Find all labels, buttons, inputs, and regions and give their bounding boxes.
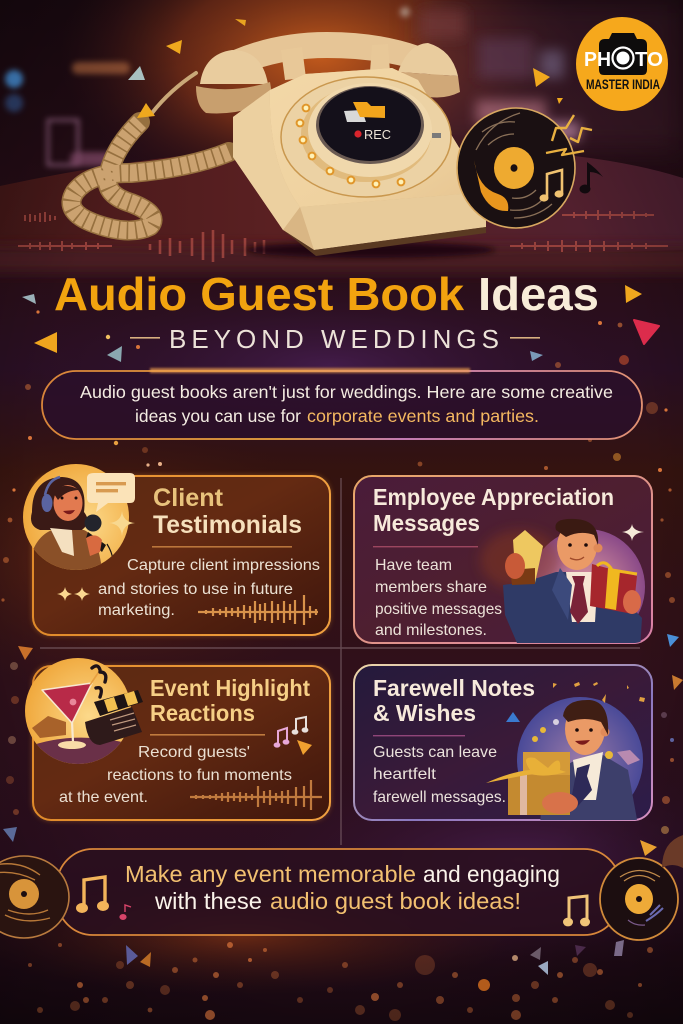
- icon: single dark note: [580, 162, 603, 194]
- icon: sound wave: [198, 595, 318, 625]
- icon: zigzag sound marks: [546, 115, 592, 155]
- illustration: man with card and gift: [480, 519, 645, 650]
- body text: farewell notes: Guests can leave: [373, 744, 497, 761]
- heading: event highlight reactions: Event Highlight: [150, 675, 310, 701]
- body text: event highlight reactions: Record guests': [138, 744, 250, 761]
- heading: client testimonials: Client: [153, 484, 224, 512]
- call to action text: with these: [154, 888, 262, 914]
- REC label: REC: [364, 127, 391, 142]
- body text: employee appreciation: positive messages: [375, 601, 502, 618]
- call to action text: [125, 861, 560, 914]
- planet and lower triangles: [126, 835, 683, 975]
- heading: farewell notes: & Wishes: [373, 700, 476, 726]
- icon: dial lights: [297, 105, 404, 187]
- icon: gold card: [513, 530, 543, 584]
- illustration: man with gift: [486, 697, 643, 825]
- icon: sound wave: [190, 780, 322, 810]
- body text: farewell notes: farewell messages.: [373, 789, 506, 806]
- telephone illustration: [71, 32, 495, 258]
- panel: employee appreciation: [354, 476, 652, 650]
- title: Audio Guest Book: [54, 268, 464, 320]
- vinyl record with music notes: [457, 108, 603, 228]
- Photo Master India logo: TO: [635, 49, 663, 71]
- body text: event highlight reactions: at the event.: [59, 789, 148, 806]
- body text: employee appreciation: members share: [375, 579, 487, 596]
- icon: music notes: [274, 717, 312, 755]
- heading: event highlight reactions: Reactions: [150, 700, 255, 726]
- icon: red gift box: [590, 564, 637, 614]
- body text: event highlight reactions: [59, 744, 292, 806]
- decorative triangles around title: [22, 285, 659, 362]
- heading: client testimonials: [153, 484, 302, 539]
- blurred bar backdrop with bokeh: [5, 0, 683, 205]
- heading: farewell notes: Farewell Notes: [373, 675, 535, 701]
- panel: client testimonials: [23, 464, 330, 635]
- side triangles beside cards: [3, 634, 683, 842]
- panel: call to action: [57, 849, 620, 935]
- body text: employee appreciation: and milestones.: [375, 622, 487, 639]
- title: Ideas: [478, 268, 599, 320]
- Photo Master India logo: [576, 17, 668, 111]
- call to action text: and engaging: [423, 861, 560, 887]
- icon: clapperboard: [85, 707, 142, 745]
- sound waves on table: [18, 210, 668, 262]
- body text: client testimonials: marketing.: [98, 602, 175, 619]
- icon: double note: [540, 170, 564, 202]
- card dividers: [40, 478, 640, 845]
- body text: farewell notes: heartfelt: [373, 766, 437, 783]
- heading: employee appreciation: Employee Appreciation: [373, 484, 614, 510]
- panel: event highlight reactions: [20, 658, 330, 820]
- intro text: corporate events and parties.: [307, 406, 539, 426]
- panel: farewell notes: [354, 665, 652, 825]
- body text: client testimonials: [98, 557, 320, 619]
- body text: employee appreciation: [375, 557, 502, 639]
- background sparkle particles: [1, 310, 675, 1021]
- call to action text: audio guest book ideas!: [270, 888, 521, 914]
- phone body: [233, 68, 486, 250]
- icon: golden gift box: [523, 752, 570, 775]
- intro text: Audio guest books aren't just for weddings. Here are some creative: [80, 382, 613, 402]
- icon: coiled phone cord: [71, 73, 229, 231]
- body text: event highlight reactions: reactions to fun moments: [107, 767, 292, 784]
- icon: speech bubble: [87, 473, 135, 512]
- icon: pink note: [119, 905, 131, 920]
- body text: farewell notes: [373, 744, 506, 806]
- panel: intro: [42, 368, 642, 439]
- confetti: [506, 682, 645, 722]
- table surface: [0, 150, 683, 272]
- Photo Master India logo: PH: [584, 49, 611, 71]
- body text: client testimonials: Capture client impressions: [127, 557, 320, 574]
- intro text: [80, 382, 613, 426]
- icon: avatar with microphone: [23, 464, 135, 570]
- floating triangles near phone: [128, 19, 563, 118]
- icon: left vinyl record: [0, 856, 69, 938]
- icon: right vinyl record: [600, 858, 678, 940]
- icon: sparkles: [57, 587, 90, 601]
- handset: [196, 32, 460, 113]
- heading: client testimonials: Testimonials: [153, 511, 302, 539]
- icon: cocktail and clapperboard: [20, 658, 143, 770]
- rotary dial: [281, 77, 451, 197]
- heading: event highlight reactions: [150, 675, 310, 726]
- intro text: ideas you can use for: [135, 406, 301, 426]
- icon: right double note: [563, 896, 590, 926]
- heading: employee appreciation: [373, 484, 614, 536]
- icon: folder on screen: [344, 102, 385, 122]
- call to action text: Make any event memorable: [125, 861, 416, 887]
- Photo Master India logo: MASTER INDIA: [586, 77, 660, 92]
- body text: client testimonials: and stories to use in future: [98, 581, 293, 598]
- subtitle: BEYOND WEDDINGS: [169, 324, 499, 354]
- heading: farewell notes: [373, 675, 535, 726]
- heading: employee appreciation: Messages: [373, 510, 480, 536]
- icon: left double note: [76, 877, 109, 913]
- body text: employee appreciation: Have team: [375, 557, 452, 574]
